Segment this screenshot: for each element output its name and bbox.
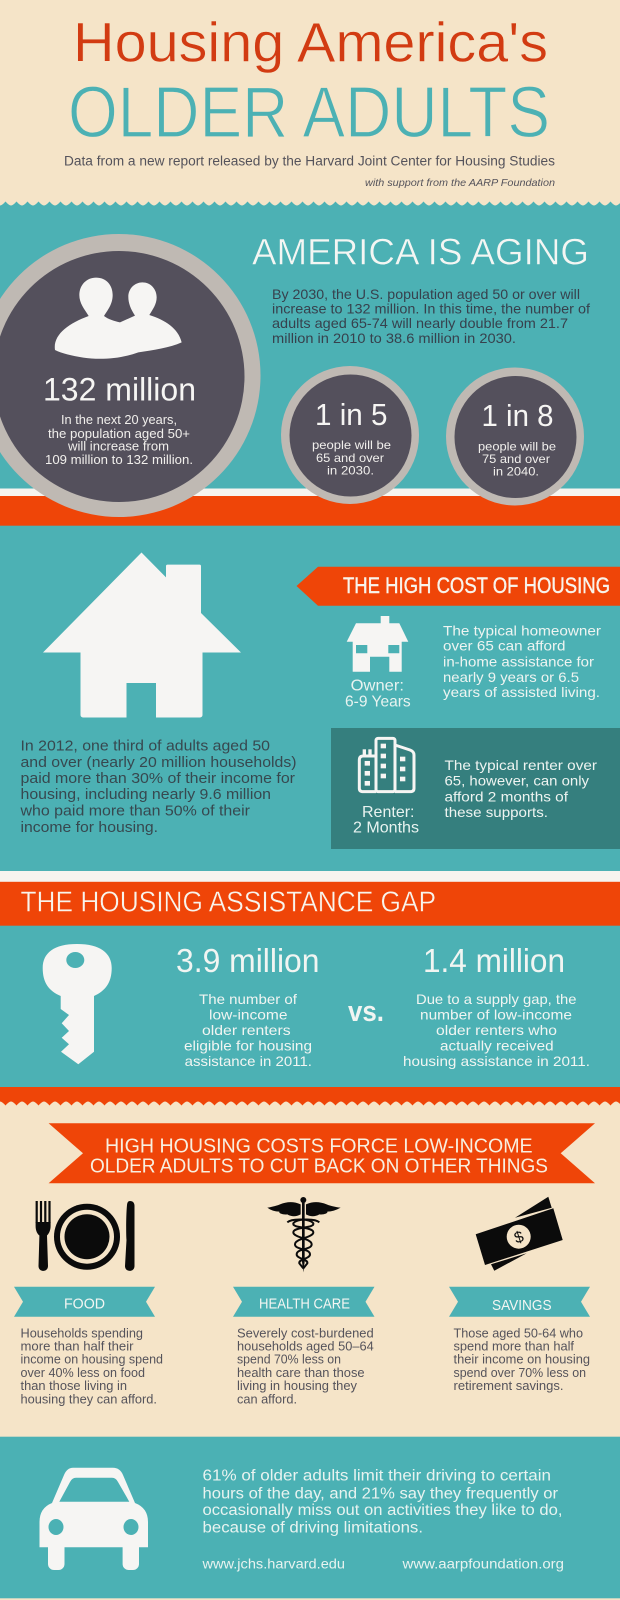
subtitle: Data from a new report released by the Harvard Joint Center for Housing Studies xyxy=(64,154,555,169)
stat: 132 million: 132 million xyxy=(43,372,196,408)
text: savings paragraph: retirement savings. xyxy=(454,1379,564,1393)
text: cost burden paragraph: In 2012, one third of adults aged 50 xyxy=(20,739,270,755)
text: renter paragraph: The typical renter over xyxy=(444,757,597,773)
text: food paragraph: than those living in xyxy=(20,1379,127,1393)
text: renter paragraph: these supports. xyxy=(444,804,548,820)
icon: apartment buildings xyxy=(359,738,414,792)
link: JCHS website: www.jchs.harvard.edu xyxy=(201,1556,345,1571)
text: savings paragraph: spend more than half xyxy=(454,1340,575,1354)
icon: money xyxy=(476,1197,563,1271)
title xyxy=(68,10,550,153)
text: food paragraph: income on housing spend xyxy=(20,1353,163,1367)
panel: driving footer background xyxy=(0,1437,620,1598)
stat: 3.9 million eligible: eligible for housing xyxy=(184,1038,312,1054)
label: renter duration: Renter: xyxy=(362,804,414,821)
text: food paragraph: over 40% less on food xyxy=(20,1366,145,1380)
text: health care paragraph: can afford. xyxy=(237,1392,297,1406)
panel: header background xyxy=(0,0,620,207)
ribbon: savings: SAVINGS xyxy=(492,1297,552,1314)
circle: 1 in 8: 75 and over xyxy=(482,452,550,466)
title: Housing America's xyxy=(73,10,548,74)
stat: 3.9 million eligible xyxy=(176,942,320,1069)
stat: 3.9 million eligible: 3.9 million xyxy=(176,942,320,979)
icon: money: $ xyxy=(512,1228,526,1247)
ribbon: health care: HEALTH CARE xyxy=(259,1295,350,1312)
text: cost burden paragraph xyxy=(19,739,297,836)
circle: 1 in 5: in 2030. xyxy=(327,463,374,477)
text: driving paragraph: because of driving limitations. xyxy=(202,1519,423,1536)
text: population increase: 109 million to 132 million. xyxy=(45,453,193,467)
icon: key xyxy=(43,944,112,1064)
text: health care paragraph: spend 70% less on xyxy=(237,1353,341,1367)
label: renter duration: 2 Months xyxy=(353,820,419,836)
icon: plate and cutlery xyxy=(36,1201,134,1271)
text: aging paragraph: By 2030, the U.S. population aged 50 or over will xyxy=(272,287,580,302)
stat: 1.4 million received: 1.4 million xyxy=(423,942,565,979)
text: population increase xyxy=(45,413,193,467)
circle: 1 in 5: 65 and over xyxy=(316,451,384,465)
text: population increase: will increase from xyxy=(67,440,169,454)
text: health care paragraph: Severely cost-burdened xyxy=(237,1326,374,1340)
text: driving paragraph: 61% of older adults limit their driving to certain xyxy=(202,1468,551,1485)
text: owner paragraph: in-home assistance for xyxy=(443,653,594,669)
text: population increase: In the next 20 years, xyxy=(61,413,177,427)
ribbon: savings xyxy=(449,1287,590,1317)
ribbon: food xyxy=(14,1287,155,1317)
text: owner paragraph xyxy=(443,622,601,700)
text: driving paragraph: occasionally miss out on activities they like to do, xyxy=(202,1502,562,1519)
text: driving paragraph: hours of the day, and 21% say they frequently or xyxy=(202,1485,558,1502)
icon: two people xyxy=(55,278,182,359)
icon: large house xyxy=(43,552,241,718)
text: food paragraph: more than half their xyxy=(20,1340,134,1354)
text: food paragraph xyxy=(20,1326,163,1406)
text: aging paragraph xyxy=(272,287,590,346)
text: renter paragraph: 65, however, can only xyxy=(444,773,589,789)
stat: 3.9 million eligible: older renters xyxy=(202,1022,291,1038)
text: driving paragraph xyxy=(202,1468,562,1536)
text: savings paragraph: Those aged 50-64 who xyxy=(454,1326,583,1340)
circle: 1 in 5 xyxy=(281,366,419,504)
stat: 1.4 million received: housing assistance in 2011. xyxy=(403,1053,590,1069)
circle: 1 in 8 xyxy=(446,368,584,506)
label: versus: vs. xyxy=(348,996,384,1028)
text: aging paragraph: increase to 132 million. In this time, the number of xyxy=(272,302,590,317)
ribbon: food: FOOD xyxy=(64,1295,105,1312)
label: owner duration: 6-9 Years xyxy=(345,694,411,711)
text: health care paragraph: health care than those xyxy=(237,1366,365,1380)
heading band: the housing assistance gap xyxy=(0,882,620,926)
title: OLDER ADULTS xyxy=(68,73,550,153)
text: owner paragraph: nearly 9 years or 6.5 xyxy=(443,669,579,685)
text: renter paragraph: afford 2 months of xyxy=(444,788,568,804)
banner: the high cost of housing xyxy=(296,567,620,606)
ribbon: high housing costs heading: OLDER ADULTS TO CUT BACK ON OTHER THINGS xyxy=(90,1155,548,1178)
icon: small owner house xyxy=(347,616,408,672)
text: owner paragraph: The typical homeowner xyxy=(443,622,601,638)
label: renter duration xyxy=(353,804,419,836)
stat: 3.9 million eligible: assistance in 2011. xyxy=(185,1053,312,1069)
heading: America is aging: AMERICA IS AGING xyxy=(252,231,589,272)
ribbon: high housing costs heading xyxy=(49,1123,595,1183)
text: owner paragraph: years of assisted living. xyxy=(443,684,600,700)
band: assistance gap white strip xyxy=(0,871,620,882)
text: aging paragraph: million in 2010 to 38.6 million in 2030. xyxy=(272,331,516,346)
panel: renter xyxy=(331,728,620,849)
text: cost burden paragraph: who paid more than 50% of their xyxy=(19,804,250,820)
text: health care paragraph: living in housing they xyxy=(237,1379,358,1393)
text: savings paragraph xyxy=(454,1326,590,1393)
heading band: the housing assistance gap: THE HOUSING ASSISTANCE GAP xyxy=(20,886,436,918)
text: aging paragraph: adults aged 65-74 will nearly double from 21.7 xyxy=(272,316,568,331)
ribbon: health care xyxy=(233,1287,374,1317)
link: AARP Foundation website: www.aarpfoundation.org xyxy=(401,1556,564,1571)
circle: 1 in 8: people will be xyxy=(478,440,556,454)
text: health care paragraph: households aged 50–64 xyxy=(237,1340,374,1354)
stat: 1.4 million received xyxy=(403,942,590,1069)
band: lower orange xyxy=(0,1087,620,1107)
support credit: with support from the AARP Foundation xyxy=(365,177,555,189)
text: renter paragraph xyxy=(444,757,597,820)
divider band: white and orange xyxy=(0,488,620,526)
circle: 1 in 5: 1 in 5 xyxy=(315,397,388,432)
text: savings paragraph: their income on housing xyxy=(454,1353,590,1367)
text: population increase: the population aged 50+ xyxy=(48,427,190,441)
label: owner duration: Owner: xyxy=(351,678,404,695)
panel: teal section background xyxy=(0,200,620,1087)
icon: caduceus xyxy=(267,1197,341,1272)
text: food paragraph: housing they can afford. xyxy=(20,1392,157,1406)
text: cost burden paragraph: paid more than 30% of their income for xyxy=(20,771,295,787)
label: owner duration xyxy=(345,678,411,711)
text: health care paragraph xyxy=(237,1326,374,1406)
stat: 3.9 million eligible: low-income xyxy=(209,1007,288,1023)
text: cost burden paragraph: housing, including nearly 9.6 million xyxy=(20,787,271,803)
stat: 1.4 million received: older renters who xyxy=(436,1022,557,1038)
text: owner paragraph: over 65 can afford xyxy=(443,638,566,654)
circle: 132 million xyxy=(0,234,260,517)
stat: 1.4 million received: number of low-income xyxy=(420,1007,572,1023)
circle: 1 in 8: in 2040. xyxy=(493,465,539,479)
icon: car xyxy=(40,1468,148,1570)
text: food paragraph: Households spending xyxy=(20,1326,143,1340)
ribbon: high housing costs heading: HIGH HOUSING COSTS FORCE LOW-INCOME xyxy=(105,1134,533,1157)
text: cost burden paragraph: income for housing. xyxy=(20,820,158,836)
text: cost burden paragraph: and over (nearly 20 million households) xyxy=(20,755,297,771)
circle: 1 in 8: 1 in 8 xyxy=(482,398,554,433)
text: savings paragraph: spend over 70% less on xyxy=(454,1366,586,1380)
circle: 1 in 5: people will be xyxy=(312,438,391,452)
stat: 3.9 million eligible: The number of xyxy=(199,991,297,1007)
stat: 1.4 million received: actually received xyxy=(440,1038,554,1054)
stat: 1.4 million received: Due to a supply gap, the xyxy=(416,991,577,1007)
